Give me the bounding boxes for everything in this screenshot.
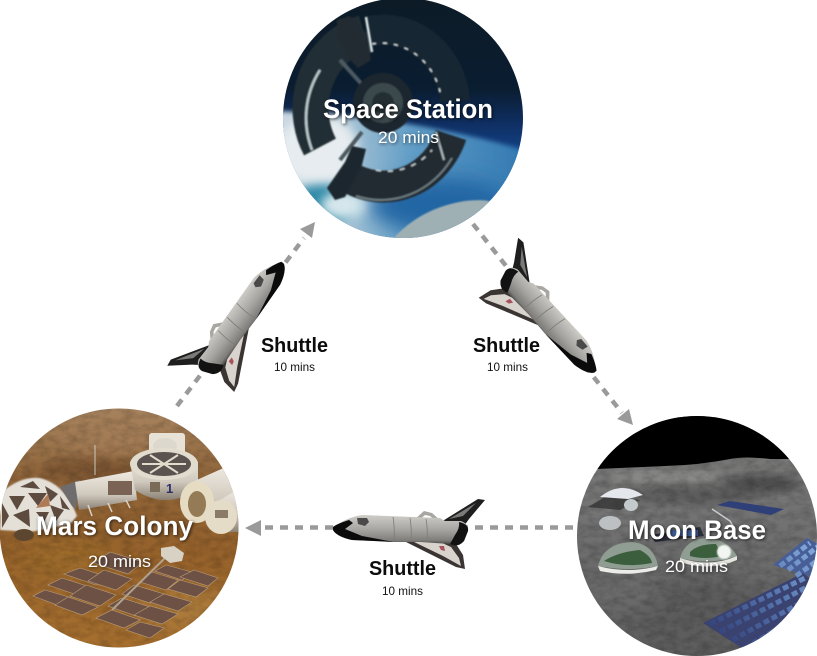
label: bottom shuttle: 10 mins <box>382 584 423 598</box>
left dome <box>598 542 658 574</box>
hub <box>353 73 413 133</box>
label: left shuttle: 10 mins <box>274 360 315 374</box>
label: left shuttle: Shuttle <box>261 335 328 357</box>
label: 20 mins: 20 mins <box>378 128 439 147</box>
antenna dome <box>588 488 643 530</box>
corridor <box>60 445 137 516</box>
arrow: Space Station to Moon Base <box>473 224 633 425</box>
label: right shuttle: 10 mins <box>487 360 528 374</box>
central hub <box>130 433 198 500</box>
geodesic dome <box>0 478 77 532</box>
image: moon base with domes <box>575 414 817 656</box>
icon: shuttle toward mars colony <box>333 499 485 569</box>
crane <box>712 508 734 526</box>
label: bottom shuttle <box>369 558 436 598</box>
rock <box>14 529 34 541</box>
panel: mars colony <box>0 406 242 650</box>
label: 20 mins: 20 mins <box>88 552 151 571</box>
panel: moon base <box>575 414 817 656</box>
solar arrays right <box>703 538 817 650</box>
panel: space station <box>283 0 523 238</box>
label: Mars Colony: Mars Colony <box>36 511 193 541</box>
label: 20 mins: 20 mins <box>665 557 728 576</box>
far solar array <box>717 501 784 515</box>
label: bottom shuttle: Shuttle <box>369 558 436 580</box>
connector <box>650 527 704 542</box>
label: Space Station: Space Station <box>323 94 493 124</box>
ring <box>306 30 455 200</box>
pods <box>327 16 372 200</box>
image: space station over earth <box>283 0 523 238</box>
central hub: 1 <box>166 481 173 496</box>
label: left shuttle <box>261 335 328 374</box>
label: right shuttle: Shuttle <box>473 335 540 357</box>
label: Moon Base: Moon Base <box>628 515 766 545</box>
arrow: Moon Base to Mars Colony <box>245 520 573 536</box>
icon: shuttle toward moon base <box>466 237 618 398</box>
right dome <box>680 538 737 567</box>
solar panels <box>33 552 218 638</box>
label: right shuttle <box>473 335 540 374</box>
arrow: Mars Colony to Space Station <box>177 222 315 406</box>
image: mars colony habitats <box>0 406 242 650</box>
icon: shuttle toward space station <box>166 245 315 408</box>
right modules <box>180 466 242 534</box>
